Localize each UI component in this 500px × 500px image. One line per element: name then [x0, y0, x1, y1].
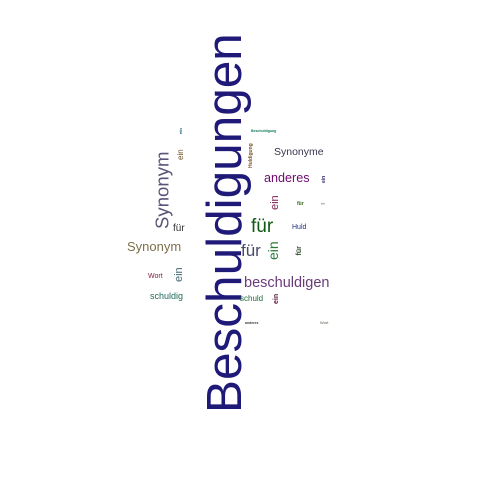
word: ein vertical red: ein — [269, 195, 281, 210]
word: für small left: für — [173, 223, 185, 234]
word: anderes: anderes — [264, 171, 310, 185]
word: beschuldigen: beschuldigen — [244, 275, 329, 291]
word: für vertical dark: für — [296, 246, 303, 256]
word: anderes tiny: anderes — [245, 321, 258, 325]
word: tiny top left: ein — [178, 128, 183, 134]
word: Synonym vertical: Synonym — [152, 151, 172, 229]
word: ein top left: ein — [176, 149, 185, 160]
word: schuld: schuld — [240, 294, 263, 303]
word: schuldig: schuldig — [150, 291, 183, 301]
word: Synonym horizontal: Synonym — [127, 239, 181, 254]
word: Huld: Huld — [292, 224, 307, 231]
word: für tiny green: für — [297, 201, 304, 207]
word: für grey: für — [241, 241, 261, 260]
word: ein vertical maroon: ein — [273, 294, 280, 304]
word: tiny mark: ein — [321, 176, 327, 183]
word: dash tiny: ein — [321, 202, 325, 206]
word: ein green vertical: ein — [265, 241, 281, 260]
word: Synonyme: Synonyme — [274, 146, 324, 158]
word: Wort: Wort — [148, 273, 163, 280]
word: ein left: ein — [173, 267, 185, 282]
word: Huldigung vertical tiny: Huldigung — [248, 143, 254, 168]
word: Wort tiny: Wort — [320, 320, 329, 325]
word: Beschuldigung tiny: Beschuldigung — [251, 129, 276, 133]
main word: Beschuldigungen: Beschuldigungen — [197, 33, 252, 413]
word: für large green: für — [251, 216, 274, 237]
